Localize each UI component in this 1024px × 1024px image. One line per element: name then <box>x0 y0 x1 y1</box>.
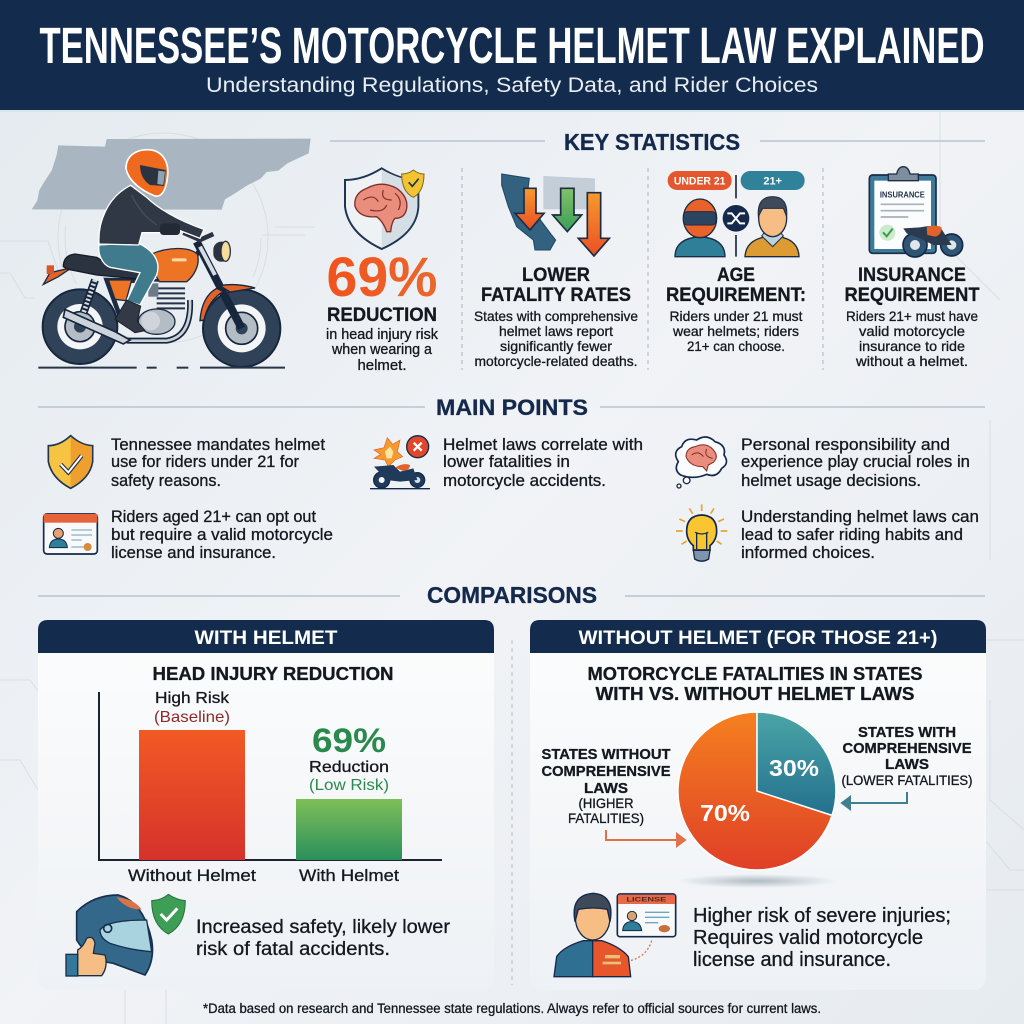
bar: with helmet <box>296 799 402 860</box>
bar label: 69% reduction: Reduction <box>309 759 389 776</box>
stat heading: REQUIREMENT: <box>666 285 806 306</box>
pie label: states with laws: COMPREHENSIVE <box>842 741 972 757</box>
point text: informed choices. <box>741 544 875 562</box>
motorcycle <box>43 233 280 367</box>
point text: Tennessee mandates helmet <box>111 436 325 454</box>
stat description: motorcycle-related deaths. <box>474 353 638 369</box>
stat description: valid motorcycle <box>859 323 965 339</box>
pie label: states without laws: (HIGHER <box>578 796 634 811</box>
panel header <box>38 620 494 653</box>
panel summary: license and insurance. <box>693 949 891 971</box>
subtitle: Understanding Regulations, Safety Data, and Rider Choices <box>206 73 818 97</box>
chart title: WITH VS. WITHOUT HELMET LAWS <box>596 684 914 704</box>
icon: insurance clipboard and motorcycle <box>869 167 963 257</box>
axis labels: With Helmet <box>299 866 399 885</box>
stat description <box>846 308 978 369</box>
chart title <box>588 664 922 704</box>
footnote: *Data based on research and Tennessee state regulations. Always refer to official sources for current laws. <box>203 1001 821 1016</box>
point: helmet laws correlate <box>370 436 643 490</box>
panel summary: Higher risk of severe injuries; <box>693 905 951 927</box>
point text <box>111 508 333 562</box>
stat description: insurance to ride <box>859 338 965 354</box>
stat: insurance requirement <box>844 167 980 369</box>
icon: motorcycle crash <box>370 436 430 489</box>
pie label: states without laws <box>542 747 671 826</box>
icon: license card <box>44 514 97 554</box>
bar label: 69% reduction: 69% <box>312 722 386 760</box>
point text <box>741 436 970 490</box>
point text: license and insurance. <box>111 544 276 562</box>
panel summary: risk of fatal accidents. <box>196 938 390 960</box>
icon: brain shield <box>345 168 424 249</box>
bar label: high risk <box>154 690 230 726</box>
point: mandate under 21 <box>48 436 325 490</box>
panel: without helmet <box>530 620 986 990</box>
pie label: states without laws: COMPREHENSIVE <box>542 764 671 780</box>
axis labels <box>128 866 399 885</box>
stat description: in head injury risk <box>326 327 439 343</box>
icon: gold shield with check <box>48 436 93 488</box>
panel header: WITHOUT HELMET (FOR THOSE 21+) <box>578 628 938 649</box>
value: 70%: 70% <box>700 800 750 826</box>
stat description: Riders 21+ must have <box>846 308 978 324</box>
section heading: key statistics: KEY STATISTICS <box>564 129 740 155</box>
pie label: states with laws: STATES WITH <box>858 725 956 741</box>
pie label: states without laws: LAWS <box>584 781 628 797</box>
panel summary <box>693 905 951 971</box>
chart title: MOTORCYCLE FATALITIES IN STATES <box>588 664 922 684</box>
point: understanding helmet laws <box>676 504 979 562</box>
point text <box>111 436 325 490</box>
panel summary: Requires valid motorcycle <box>693 927 923 949</box>
icon: age groups: 21+ <box>763 175 782 187</box>
stat description: States with comprehensive <box>474 308 638 324</box>
panel summary: Increased safety, likely lower <box>196 916 451 938</box>
point text: lower fatalities in <box>443 453 570 471</box>
stat: age requirement <box>666 171 806 354</box>
axis labels: Without Helmet <box>128 866 256 885</box>
stat description: wear helmets; riders <box>672 323 799 339</box>
point text: use for riders under 21 for <box>111 453 299 471</box>
stat heading <box>666 265 806 306</box>
road line <box>38 365 285 371</box>
icon: age groups: UNDER 21 <box>674 175 725 187</box>
point text: lead to safer riding habits and <box>741 526 963 544</box>
illustration: rider on motorcycle over Tennessee map <box>32 139 311 368</box>
point text <box>443 436 643 490</box>
pie label: states with laws <box>842 725 972 788</box>
bar chart: head injury reduction <box>99 690 442 885</box>
stat heading: REQUIREMENT <box>844 285 980 306</box>
slice: 30% <box>757 712 836 815</box>
stat heading: FATALITY RATES <box>481 285 631 306</box>
point: personal responsibility <box>676 436 970 490</box>
stat heading: INSURANCE <box>858 265 966 286</box>
icon: light bulb <box>676 504 727 561</box>
point text: but require a valid motorcycle <box>111 526 333 544</box>
point text <box>741 508 979 562</box>
bar label: high risk: High Risk <box>155 690 230 707</box>
panel header <box>530 620 986 653</box>
pie chart: fatalities <box>677 712 837 888</box>
bar label: 69% reduction <box>309 722 389 794</box>
stat heading: AGE <box>717 265 755 286</box>
point text: experience play crucial roles in <box>741 453 970 471</box>
stat description <box>326 327 439 374</box>
chart title: HEAD INJURY REDUCTION <box>152 664 394 684</box>
pie label: states without laws: FATALITIES) <box>568 811 644 826</box>
icon: insurance clipboard and motorcycle: INSURANCE <box>880 189 925 199</box>
arrow: to orange slice <box>606 830 685 846</box>
icon: rider with license: LICENSE <box>626 898 666 904</box>
panel: with helmet <box>38 620 494 990</box>
panel summary <box>196 916 451 960</box>
bar label: high risk: (Baseline) <box>154 709 230 726</box>
point: riders 21+ can opt out <box>44 508 333 562</box>
point text: motorcycle accidents. <box>443 472 606 490</box>
stat value: 69% <box>326 245 438 308</box>
point text: helmet usage decisions. <box>741 472 921 490</box>
point text: Personal responsibility and <box>741 436 950 454</box>
value: 30%: 30% <box>769 755 819 781</box>
bar label: 69% reduction: (Low Risk) <box>309 777 389 794</box>
stat heading <box>481 265 631 306</box>
stat description: helmet. <box>358 358 406 374</box>
pie label: states without laws: STATES WITHOUT <box>542 747 671 763</box>
point text: safety reasons. <box>111 472 221 490</box>
stat: lower fatality rates <box>474 174 638 369</box>
title banner <box>0 0 1024 112</box>
icon: helmet with thumbs up and shield <box>66 894 185 976</box>
stat description: Riders under 21 must <box>670 308 803 324</box>
stat label: REDUCTION <box>327 305 437 326</box>
section heading: comparisons: COMPARISONS <box>427 582 597 608</box>
stat description <box>670 308 803 354</box>
rider <box>99 150 204 333</box>
pie label: states with laws: LAWS <box>885 757 929 773</box>
pie label: states with laws: (LOWER FATALITIES) <box>842 773 972 788</box>
slice: 70% <box>678 712 832 870</box>
icon: rider with license <box>554 893 676 977</box>
point text: Riders aged 21+ can opt out <box>111 508 316 526</box>
stat description: significantly fewer <box>500 338 612 354</box>
panel header: WITH HELMET <box>194 628 338 649</box>
icon: age groups <box>668 171 805 257</box>
stat heading: LOWER <box>522 265 590 286</box>
icon: thought bubble with brain <box>676 437 727 488</box>
Tennessee map <box>32 139 311 210</box>
point text: Understanding helmet laws can <box>741 508 979 526</box>
stat heading <box>844 265 980 306</box>
section heading: main points: MAIN POINTS <box>436 395 588 420</box>
stat description <box>474 308 638 369</box>
point text: Helmet laws correlate with <box>443 436 643 454</box>
bar: without helmet <box>139 730 245 860</box>
stat description: 21+ can choose. <box>687 338 785 354</box>
arrow: to teal slice <box>842 792 907 809</box>
stat: 69% reduction <box>326 168 439 374</box>
icon: map with down arrows <box>502 174 609 256</box>
stat description: without a helmet. <box>855 353 968 369</box>
stat description: when wearing a <box>331 342 433 358</box>
stat description: helmet laws report <box>499 323 613 339</box>
